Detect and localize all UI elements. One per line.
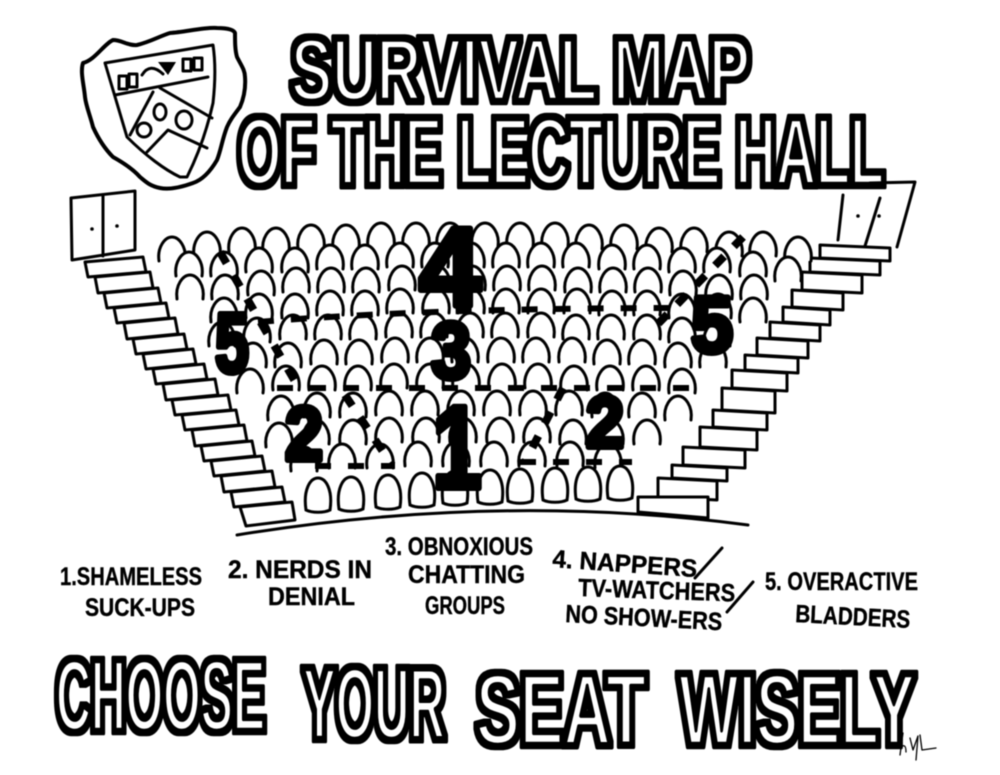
legend 5: overactive bladders: 5. OVERACTIVE	[765, 568, 918, 596]
zone numbers	[215, 205, 733, 514]
floor line	[237, 511, 748, 535]
title	[238, 20, 884, 205]
legend 3: obnoxious chatting groups: GROUPS	[425, 592, 505, 620]
left staircase	[85, 257, 295, 526]
legend 3: obnoxious chatting groups: CHATTING	[408, 561, 525, 589]
legend 2: nerds in denial	[228, 556, 372, 611]
title: SURVIVAL MAP	[291, 20, 750, 119]
zone numbers: 1	[432, 382, 482, 514]
right doors	[838, 182, 915, 247]
legend 4: nappers, tv-watchers, no show-ers: TV-WATCHERS	[578, 574, 736, 607]
seating rows	[159, 223, 811, 512]
legend 3: obnoxious chatting groups	[385, 533, 533, 620]
legend 1: shameless suck-ups: SUCK-UPS	[85, 594, 195, 622]
legend 2: nerds in denial: DENIAL	[268, 583, 355, 611]
crest icon	[82, 28, 245, 189]
slogan: SEAT	[476, 654, 646, 766]
artist signature	[900, 733, 936, 760]
zone numbers: 2	[586, 383, 624, 463]
zone numbers: 4	[419, 205, 481, 330]
legend 5: overactive bladders: BLADDERS	[795, 600, 911, 634]
dashed zone boundaries	[220, 237, 743, 466]
legend 5: overactive bladders	[765, 568, 918, 634]
zone numbers: 5	[215, 296, 249, 390]
zone numbers: 3	[431, 306, 471, 395]
zone numbers: 2	[285, 392, 323, 477]
legend 4: nappers, tv-watchers, no show-ers: 4. NAPPERS	[552, 545, 698, 583]
slogan: CHOOSE	[56, 640, 265, 752]
legend 3: obnoxious chatting groups: 3. OBNOXIOUS	[385, 533, 533, 561]
legend 1: shameless suck-ups	[60, 563, 202, 622]
slogan: YOUR	[303, 648, 445, 760]
legend 1: shameless suck-ups: 1.SHAMELESS	[60, 563, 202, 591]
legend 4: nappers, tv-watchers, no show-ers: NO SHOW-ERS	[565, 600, 723, 636]
zone numbers: 5	[691, 280, 733, 369]
right staircase	[638, 245, 890, 518]
left doors	[71, 191, 135, 260]
legend 2: nerds in denial: 2. NERDS IN	[228, 556, 372, 584]
legend 4: nappers, tv-watchers, no show-ers	[552, 545, 753, 636]
slogan	[56, 640, 915, 766]
